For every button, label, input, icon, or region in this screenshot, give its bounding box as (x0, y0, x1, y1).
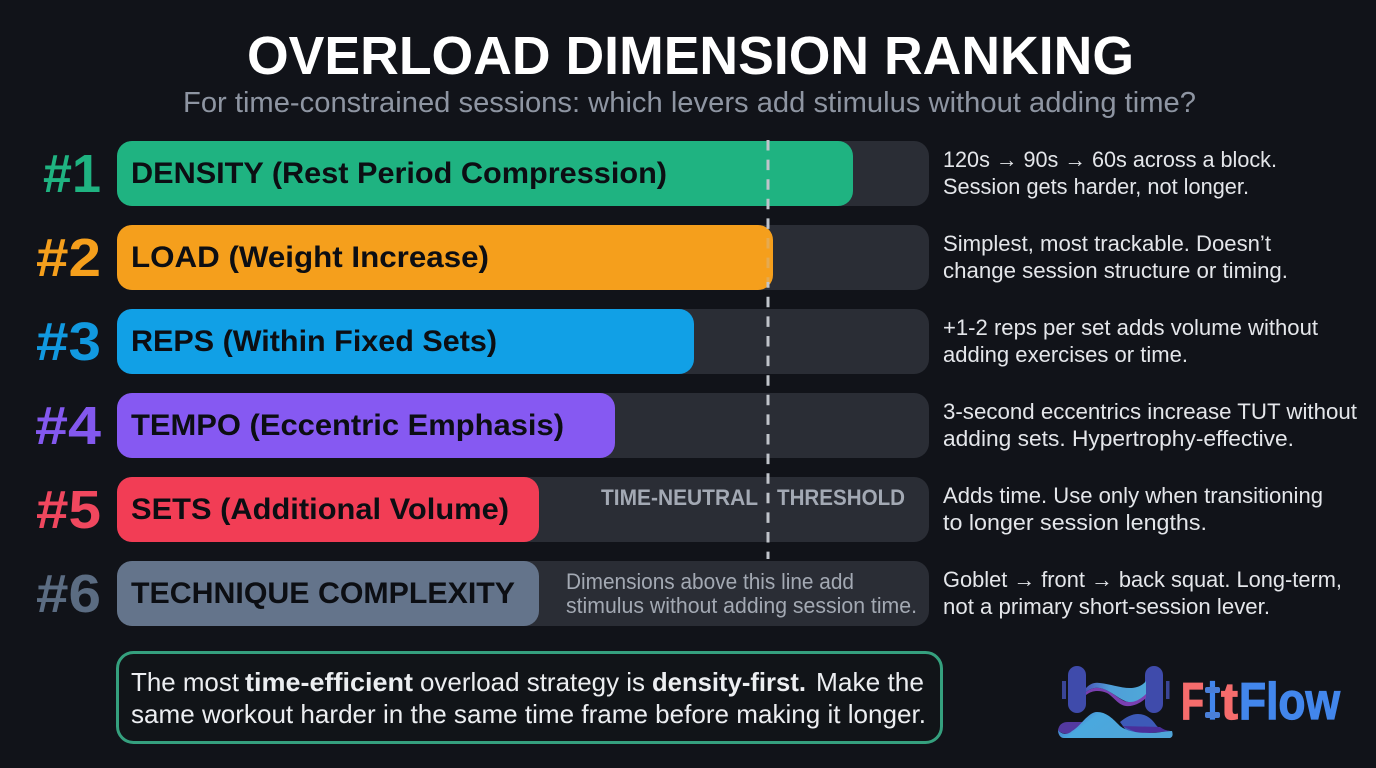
threshold label: THRESHOLD (777, 485, 905, 510)
callout: overload strategy is (420, 667, 645, 697)
note: reps: adding exercises or time. (943, 342, 1188, 367)
wordmark: F (1181, 673, 1204, 731)
bar label: load: LOAD (Weight Increase) (131, 241, 489, 274)
track 3 (117, 309, 929, 374)
row 4: tempo (35, 393, 1357, 458)
note: density: 120s → 90s → 60s across a block. (943, 147, 1277, 172)
track 5 (117, 477, 929, 542)
bar label: tempo: TEMPO (Eccentric Emphasis) (131, 409, 564, 442)
rank #6: #6 (36, 564, 101, 624)
note: sets: to longer session lengths. (943, 510, 1207, 535)
bar label: sets: SETS (Additional Volume) (131, 493, 509, 526)
rank #5: #5 (36, 480, 101, 540)
track 6 (117, 561, 929, 626)
callout (118, 652, 942, 742)
note: tempo: 3-second eccentrics increase TUT without (943, 399, 1357, 424)
note: technique: not a primary short-session lever. (943, 594, 1270, 619)
callout: same workout harder in the same time frame before making it longer. (131, 699, 926, 729)
threshold explanation: Dimensions above this line add (566, 569, 854, 594)
bar: technique (117, 561, 539, 626)
threshold dashed line (766, 140, 771, 559)
icon: dumbbell with wave (1058, 666, 1173, 738)
note: tempo: adding sets. Hypertrophy-effective. (943, 426, 1294, 451)
note: load: change session structure or timing. (943, 258, 1288, 283)
threshold label: TIME-NEUTRAL (601, 485, 758, 510)
rank #4: #4 (35, 396, 101, 456)
callout: density-first. (652, 667, 806, 697)
row 3: reps (36, 309, 1318, 374)
row 5: sets (36, 477, 1323, 542)
wordmark: t (1221, 673, 1238, 731)
row 6: technique (36, 561, 1342, 626)
wordmark: i (1208, 673, 1217, 731)
note: reps: +1-2 reps per set adds volume without (943, 315, 1318, 340)
note: load: Simplest, most trackable. Doesn’t (943, 231, 1271, 256)
threshold label (601, 485, 905, 510)
track 1 (117, 141, 929, 206)
track 2 (117, 225, 929, 290)
row 1: density (43, 141, 1277, 206)
rank #2: #2 (36, 228, 101, 288)
track 4 (117, 393, 929, 458)
wordmark: Flow (1239, 673, 1340, 731)
note: technique: Goblet → front → back squat. Long-term, (943, 567, 1342, 592)
logo: FitFlow (1058, 666, 1340, 738)
callout: Make the (816, 667, 924, 697)
bar: load (117, 225, 773, 290)
bar: tempo (117, 393, 615, 458)
subtitle: For time-constrained sessions: which levers add stimulus without adding time? (183, 87, 1196, 119)
bar: reps (117, 309, 694, 374)
title: OVERLOAD DIMENSION RANKING (247, 26, 1134, 86)
bar label: density: DENSITY (Rest Period Compression) (131, 157, 667, 190)
rank #3: #3 (36, 312, 101, 372)
bar label: reps: REPS (Within Fixed Sets) (131, 325, 497, 358)
bar: sets (117, 477, 539, 542)
bar label: technique: TECHNIQUE COMPLEXITY (131, 577, 515, 610)
rank #1: #1 (43, 144, 101, 204)
wordmark (1181, 673, 1340, 731)
note: sets: Adds time. Use only when transitioning (943, 483, 1323, 508)
row 2: load (36, 225, 1288, 290)
threshold explanation: stimulus without adding session time. (566, 593, 917, 618)
callout: The most (131, 667, 240, 697)
callout: time-efficient (245, 667, 413, 697)
note: density: Session gets harder, not longer. (943, 174, 1249, 199)
bar: density (117, 141, 853, 206)
